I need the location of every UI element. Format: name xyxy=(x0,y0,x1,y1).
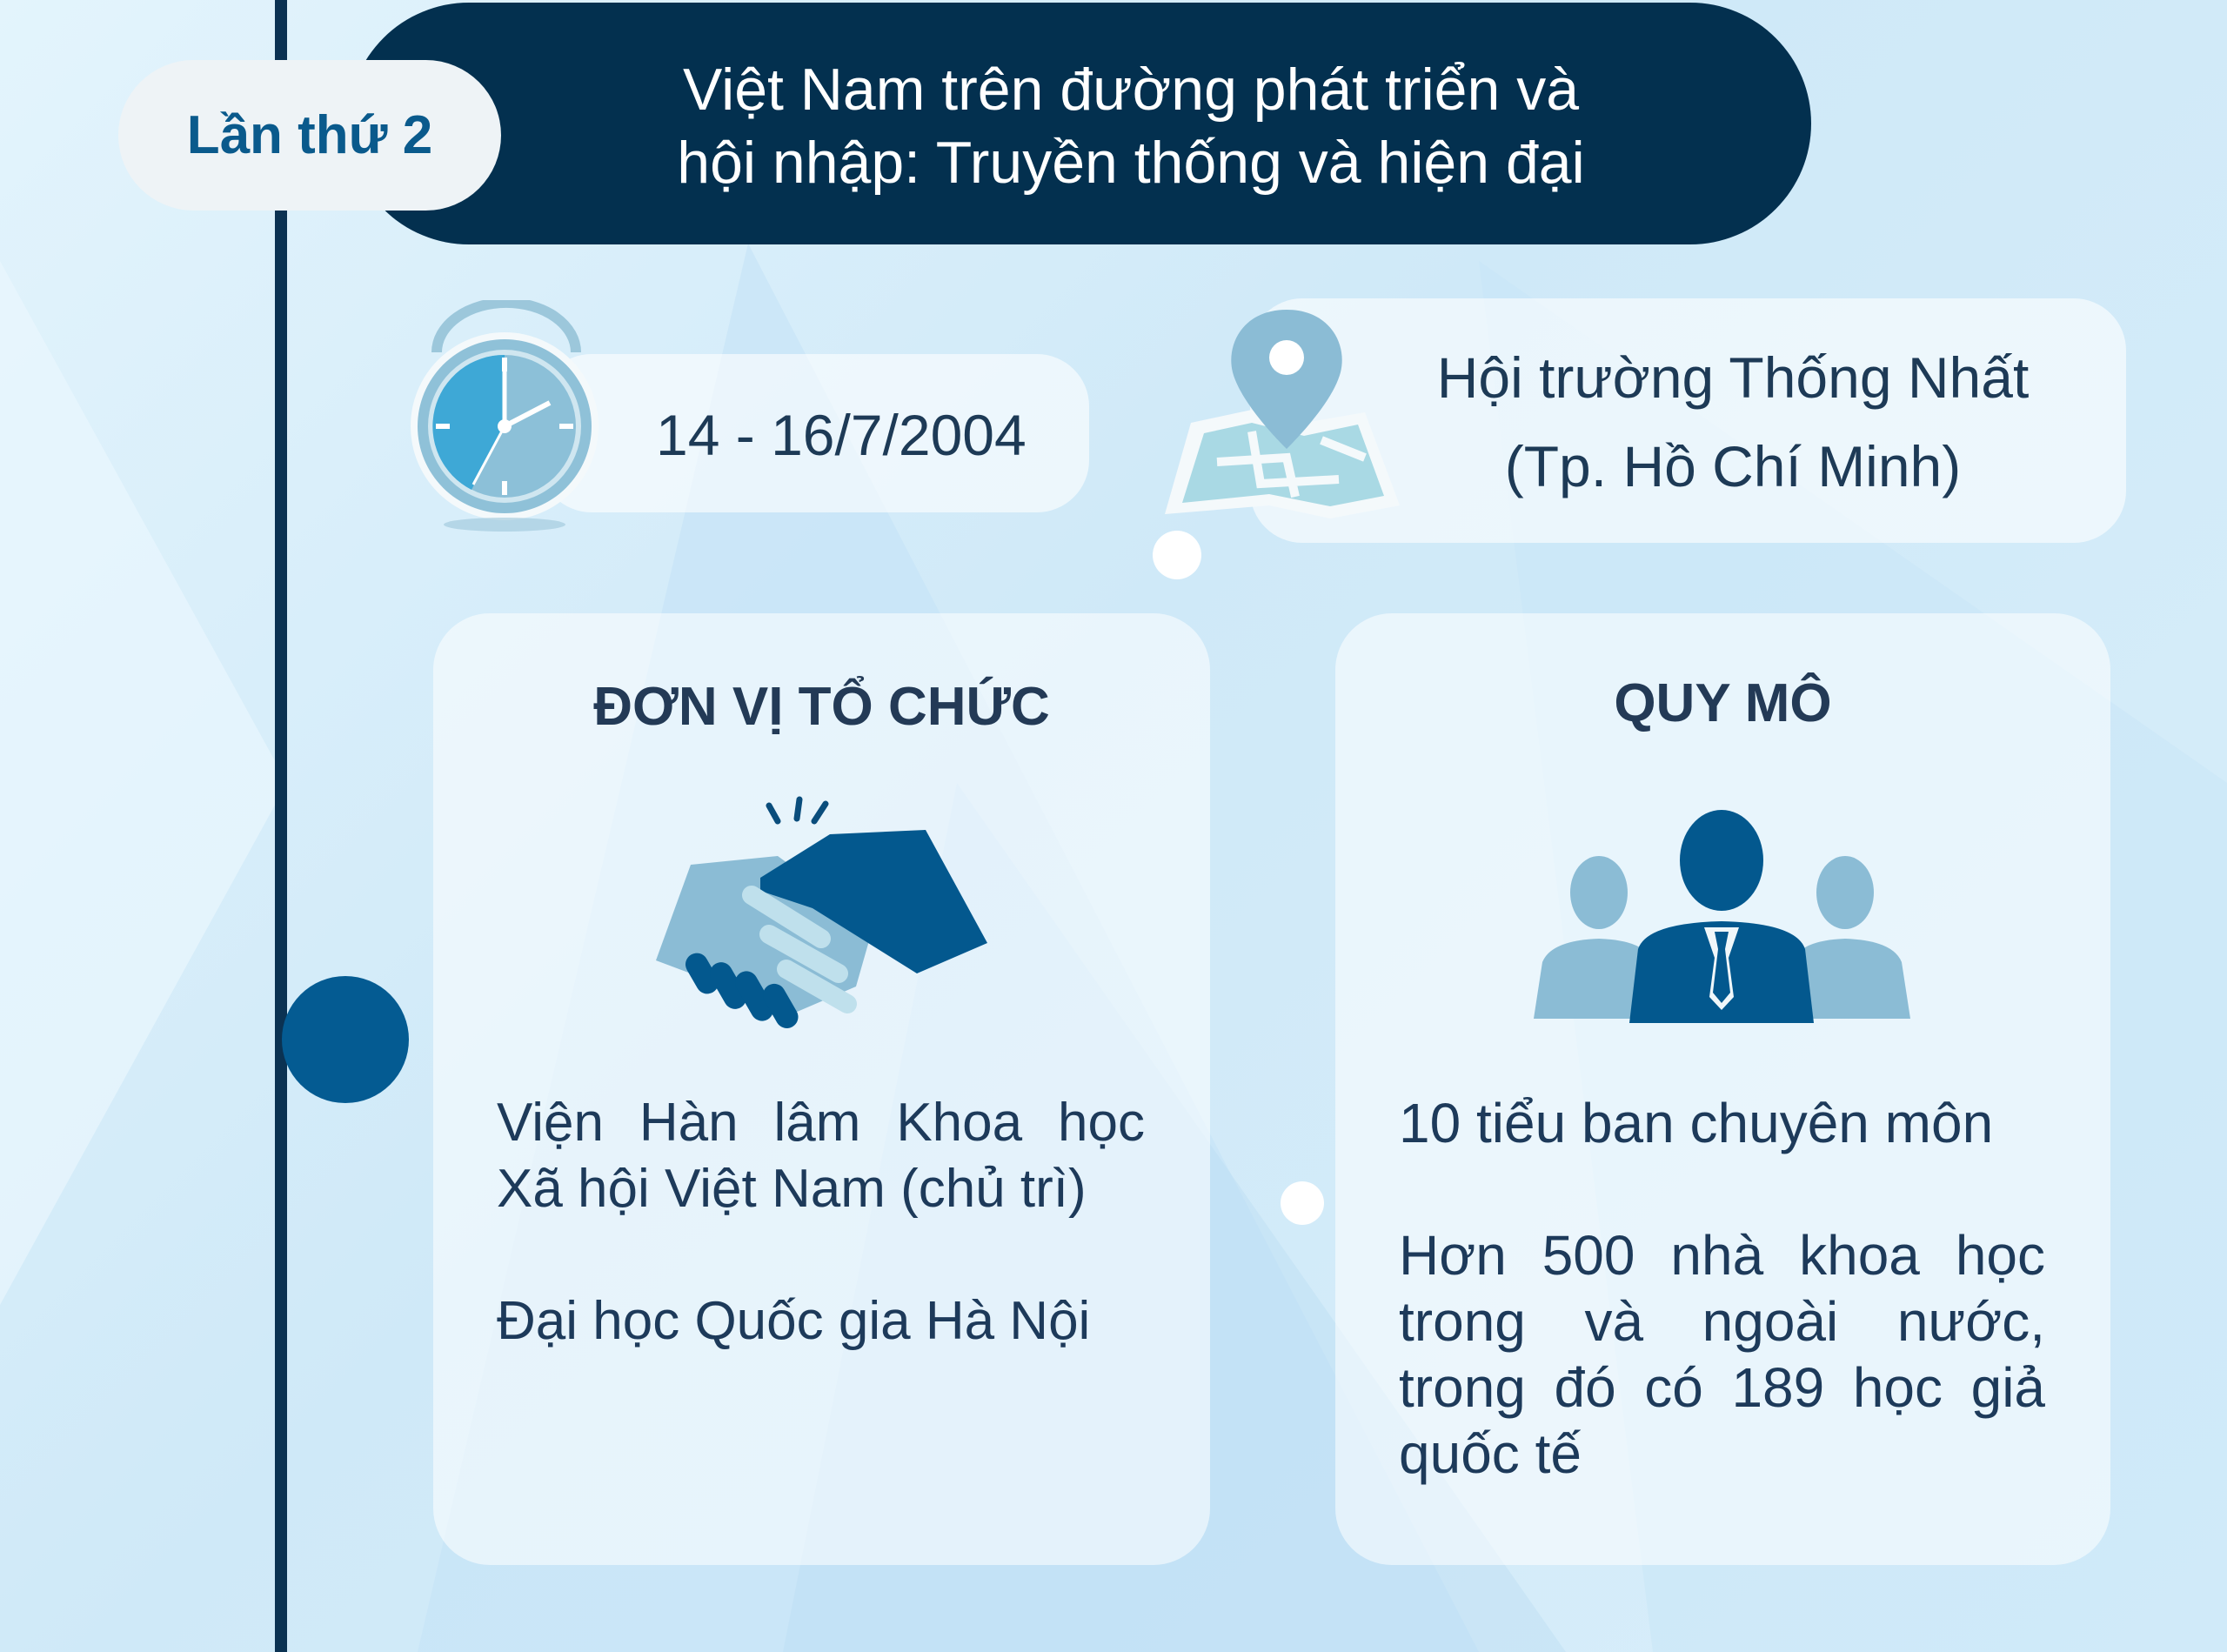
scale text: 10 tiểu ban chuyên môn xyxy=(1399,1092,1993,1154)
scale text xyxy=(1399,1092,2045,1485)
scale text: Hơn 500 nhà khoa học xyxy=(1399,1224,2045,1287)
title text: Việt Nam trên đường phát triển và xyxy=(683,57,1579,123)
organizer text xyxy=(497,1093,1145,1351)
location pill xyxy=(1250,298,2126,543)
edition label pill xyxy=(118,60,501,211)
scale text: quốc tế xyxy=(1399,1422,1582,1485)
icon: map pin xyxy=(1165,310,1384,514)
title banner xyxy=(348,3,1811,244)
location text xyxy=(1437,345,2029,498)
organizer text: Viện Hàn lâm Khoa học xyxy=(497,1093,1145,1153)
panel: organizers xyxy=(433,613,1210,1565)
scale text: trong và ngoài nước, xyxy=(1399,1290,2045,1353)
panel: scale xyxy=(1335,613,2110,1565)
icon: people xyxy=(1534,810,1910,1023)
edition label pill: Lần thứ 2 xyxy=(187,105,432,165)
organizer text: Xã hội Việt Nam (chủ trì) xyxy=(497,1159,1087,1219)
timeline vertical line xyxy=(275,0,287,1652)
date text: 14 - 16/7/2004 xyxy=(656,403,1027,467)
location text: (Tp. Hồ Chí Minh) xyxy=(1505,434,1961,498)
heading: organizers: ĐƠN VỊ TỔ CHỨC xyxy=(593,677,1050,737)
location text: Hội trường Thống Nhất xyxy=(1437,345,2029,410)
heading: scale: QUY MÔ xyxy=(1614,673,1832,733)
title text: hội nhập: Truyền thống và hiện đại xyxy=(677,130,1585,196)
scale text: trong đó có 189 học giả xyxy=(1399,1356,2045,1419)
date pill xyxy=(539,354,1089,512)
timeline dot xyxy=(282,976,409,1103)
icon: alarm clock xyxy=(411,300,592,532)
icon: handshake xyxy=(656,797,987,1028)
decorative small dots xyxy=(1153,531,1201,579)
organizer text: Đại học Quốc gia Hà Nội xyxy=(497,1291,1090,1351)
title text xyxy=(677,57,1585,196)
